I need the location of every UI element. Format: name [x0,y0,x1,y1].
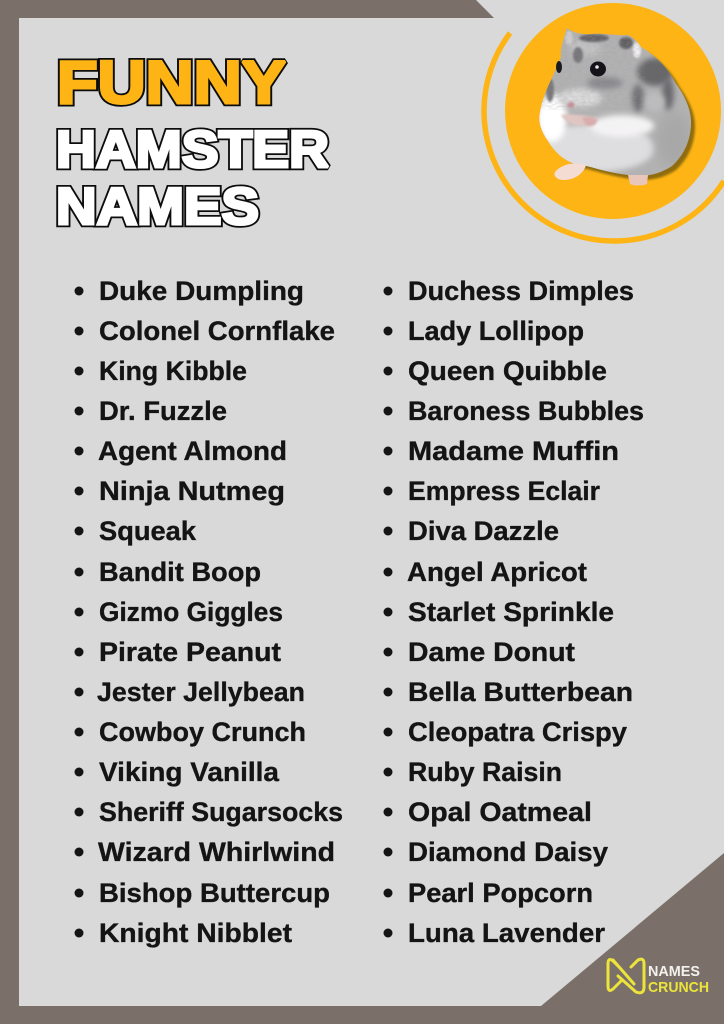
name entries: Pearl Popcorn [408,878,593,908]
name entries: Jester Jellybean [97,677,305,707]
hamster body [539,28,691,176]
name entries: Cowboy Crunch [99,717,306,747]
name entries: Starlet Sprinkle [408,597,614,627]
title word: FUNNY: FUNNY [57,49,286,116]
name entries: Dr. Fuzzle [99,396,227,426]
name entries: Bandit Boop [99,557,261,587]
bullets [74,286,84,938]
name entries: King Kibble [99,356,247,386]
hamster fur markings [535,25,692,172]
title word: NAMES: NAMES [56,178,259,236]
name entries: Cleopatra Crispy [408,717,627,747]
orange ring arc [484,33,724,241]
name entries: Sheriff Sugarsocks [99,797,343,827]
name entries: Viking Vanilla [99,757,280,787]
icon: hamster [535,25,695,186]
name entries: Pirate Peanut [99,637,281,667]
name entries: Luna Lavender [408,918,606,948]
name entries [97,276,343,948]
name entries: Agent Almond [98,436,287,466]
name entries: Dame Donut [408,637,575,667]
orange disc [505,3,721,219]
name entries: Wizard Whirlwind [98,837,335,867]
name entries: Colonel Cornflake [99,316,335,346]
name entries: Duchess Dimples [408,276,634,306]
name entries [407,276,644,948]
hamster eyes [556,61,606,76]
orange circle with ring [484,3,724,241]
name entries: Gizmo Giggles [99,597,283,627]
title word: HAMSTER: HAMSTER [56,121,329,179]
name entries: Knight Nibblet [99,918,292,948]
title [56,49,329,236]
name entries: Diamond Daisy [408,837,608,867]
name entries: Ninja Nutmeg [99,476,285,506]
name entries: Duke Dumpling [99,276,304,306]
name entries: Opal Oatmeal [408,797,592,827]
name entries: Ruby Raisin [408,757,562,787]
names list: right column [384,276,644,948]
name entries: Empress Eclair [408,476,600,506]
hamster shadow [564,51,695,180]
icon: N logo mark [608,959,644,993]
logo: Names Crunch [608,959,709,996]
hamster feet [554,163,648,186]
hamster nose and paws [561,102,598,126]
title word: HAMSTER: HAMSTER [56,121,329,179]
name entries: Queen Quibble [408,356,607,386]
name entries: Lady Lollipop [408,316,584,346]
title word: FUNNY: FUNNY [57,49,286,116]
title word: NAMES: NAMES [56,178,259,236]
bullets [384,286,392,938]
name entries: Squeak [99,516,197,546]
logo word: CRUNCH: CRUNCH [648,979,709,996]
logo word: NAMES: NAMES [648,963,700,980]
name entries: Angel Apricot [407,557,587,587]
name entries: Madame Muffin [408,436,619,466]
name entries: Bishop Buttercup [99,878,330,908]
name entries: Bella Butterbean [408,677,633,707]
name entries: Diva Dazzle [408,516,559,546]
names list: left column [74,276,343,948]
name entries: Baroness Bubbles [408,396,644,426]
